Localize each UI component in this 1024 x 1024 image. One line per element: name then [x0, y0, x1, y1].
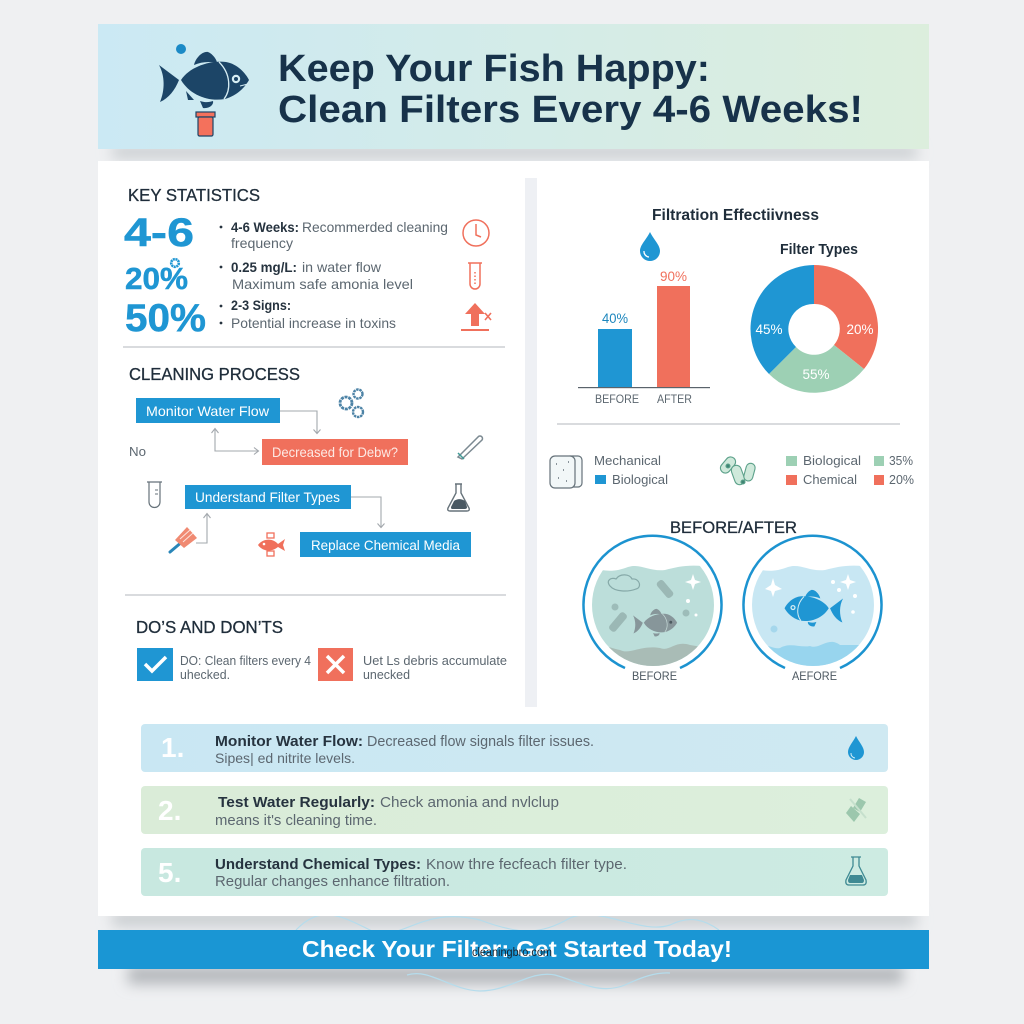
- panel: tip 1: 1.: [161, 732, 184, 763]
- bar chart: 90%: [660, 269, 687, 284]
- stat descriptions: Recommerded cleaning: [302, 219, 448, 235]
- panel: tip 3: Understand Chemical Types:: [215, 856, 421, 873]
- call to action banner: [98, 930, 929, 969]
- heading: cleaning process: CLEANING PROCESS: [129, 364, 300, 384]
- icon: up arrow: [461, 303, 491, 331]
- icon: cleaning brush: [170, 527, 197, 552]
- legend: mechanical: [594, 453, 668, 487]
- donut chart: 20%: [846, 322, 874, 337]
- panel: do's and don'ts: [136, 617, 507, 682]
- panel: tip 3: Know thre fecfeach filter type.: [426, 856, 627, 873]
- icon: water drop: [640, 232, 660, 261]
- stat descriptions: Maximum safe amonia level: [232, 276, 413, 292]
- bar chart: BEFORE: [595, 392, 639, 406]
- panel: tip 1: Decreased flow signals filter issues.: [367, 733, 594, 750]
- panel: main content card: [98, 161, 929, 916]
- flow box: understand filter types: [185, 485, 351, 509]
- legend: mechanical: Biological: [612, 472, 668, 487]
- heading: before/after: BEFORE/AFTER: [670, 518, 797, 537]
- legend: biological and chemical: Chemical: [803, 472, 857, 487]
- icon: x box: [318, 648, 353, 681]
- donut chart: [751, 265, 878, 393]
- flow box: monitor water flow: Monitor Water Flow: [146, 403, 270, 419]
- panel: header banner: [98, 24, 929, 149]
- icon: gears: [340, 390, 363, 417]
- panel: tip 3: [141, 848, 888, 896]
- heading: do's and don'ts: DO’S AND DON’TS: [136, 617, 283, 637]
- panel: tip 3: 5.: [158, 857, 181, 888]
- don't text: Uet Ls debris accumulate: [363, 654, 507, 668]
- icon: scrub brush: [846, 798, 866, 822]
- stat numbers: [124, 211, 206, 340]
- legend: biological and chemical: Biological: [803, 453, 861, 468]
- legend: mechanical: Mechanical: [594, 453, 661, 468]
- donut chart: 45%: [755, 322, 783, 337]
- icon: bacteria: [718, 455, 756, 486]
- panel: legend: [550, 453, 914, 488]
- panel: tip 1: [141, 724, 888, 772]
- do text: uhecked.: [180, 668, 230, 682]
- panel: tip 2: means it's cleaning time.: [215, 812, 377, 829]
- don't text: unecked: [363, 668, 410, 682]
- chart heading: filter types: Filter Types: [780, 242, 858, 258]
- panel: before and after: [584, 518, 881, 683]
- icon: fish with filter: [159, 44, 249, 136]
- legend: biological and chemical: [786, 453, 914, 487]
- stat descriptions: 2-3 Signs:: [231, 297, 291, 313]
- icon: clock: [463, 220, 489, 246]
- bar chart: 40%: [602, 311, 628, 326]
- do text: [180, 654, 311, 682]
- donut chart: 55%: [802, 367, 830, 382]
- panel: tip 3: Regular changes enhance filtration.: [215, 873, 450, 890]
- chart heading: Filtration Effectiivness: [652, 207, 819, 224]
- illustration: clean tank: [744, 536, 881, 680]
- do text: DO: Clean filters every 4: [180, 654, 311, 668]
- panel: tip 1: Monitor Water Flow:: [215, 733, 363, 750]
- flow box: decreased: [262, 439, 408, 465]
- flow box: understand filter types: Understand Filter Types: [195, 489, 340, 505]
- bar chart: [578, 269, 710, 406]
- panel: key statistics: [124, 185, 491, 340]
- panel: tip 2: Check amonia and nvlclup: [380, 794, 559, 811]
- icon: flask: [448, 484, 469, 511]
- label: before: BEFORE: [632, 669, 677, 683]
- icon: test tube outline: [147, 482, 162, 508]
- don't text: [363, 654, 507, 682]
- icon: pipette: [458, 436, 482, 459]
- stat numbers: 20%: [125, 261, 188, 296]
- legend: biological and chemical: 20%: [889, 472, 914, 487]
- panel: tip 1: Sipes| ed nitrite levels.: [215, 750, 355, 766]
- panel: filtration effectiveness: [578, 207, 878, 406]
- panel: tip 2: Test Water Regularly:: [218, 794, 375, 811]
- watermark: cleaningbro.com: [472, 947, 552, 959]
- icon: small gear: [171, 259, 179, 267]
- bar chart: AFTER: [657, 392, 692, 406]
- stat descriptions: 4-6 Weeks:: [231, 219, 299, 235]
- decorative waves: [296, 915, 719, 991]
- title: Clean Filters Every 4-6 Weeks!: [278, 89, 863, 131]
- illustration: dirty tank: [584, 536, 722, 680]
- stat descriptions: 0.25 mg/L:: [231, 259, 297, 275]
- label: no: No: [129, 444, 146, 459]
- stat descriptions: in water flow: [302, 259, 382, 275]
- flow box: replace chemical media: Replace Chemical Media: [311, 537, 460, 553]
- flow box: replace chemical media: [300, 532, 471, 557]
- flow box: monitor water flow: [136, 398, 280, 423]
- title: [278, 48, 863, 131]
- stat descriptions: Potential increase in toxins: [231, 315, 396, 331]
- legend: biological and chemical: 35%: [889, 453, 913, 468]
- panel: tip 2: 2.: [158, 795, 181, 826]
- stat numbers: 50%: [125, 297, 206, 340]
- heading: key statistics: KEY STATISTICS: [128, 185, 260, 205]
- icon: water drop: [848, 736, 864, 760]
- icon: sponge: [550, 456, 582, 488]
- icon: check box: [137, 648, 173, 681]
- panel: tip 2: [141, 786, 888, 834]
- flow arrows: [196, 411, 384, 543]
- panel: cleaning process: [129, 364, 482, 557]
- title: Keep Your Fish Happy:: [278, 48, 710, 90]
- stat numbers: 4-6: [124, 211, 194, 255]
- flow box: decreased: Decreased for Debw?: [272, 444, 398, 460]
- icon: coral fish: [258, 533, 285, 556]
- icon: test tube: [468, 263, 482, 289]
- stat descriptions: frequency: [231, 235, 293, 251]
- call to action banner: Check Your Filter: Get Started Today!: [302, 936, 732, 962]
- label: after: AEFORE: [792, 669, 837, 683]
- icon: flask: [846, 857, 866, 885]
- stat descriptions: [220, 219, 448, 331]
